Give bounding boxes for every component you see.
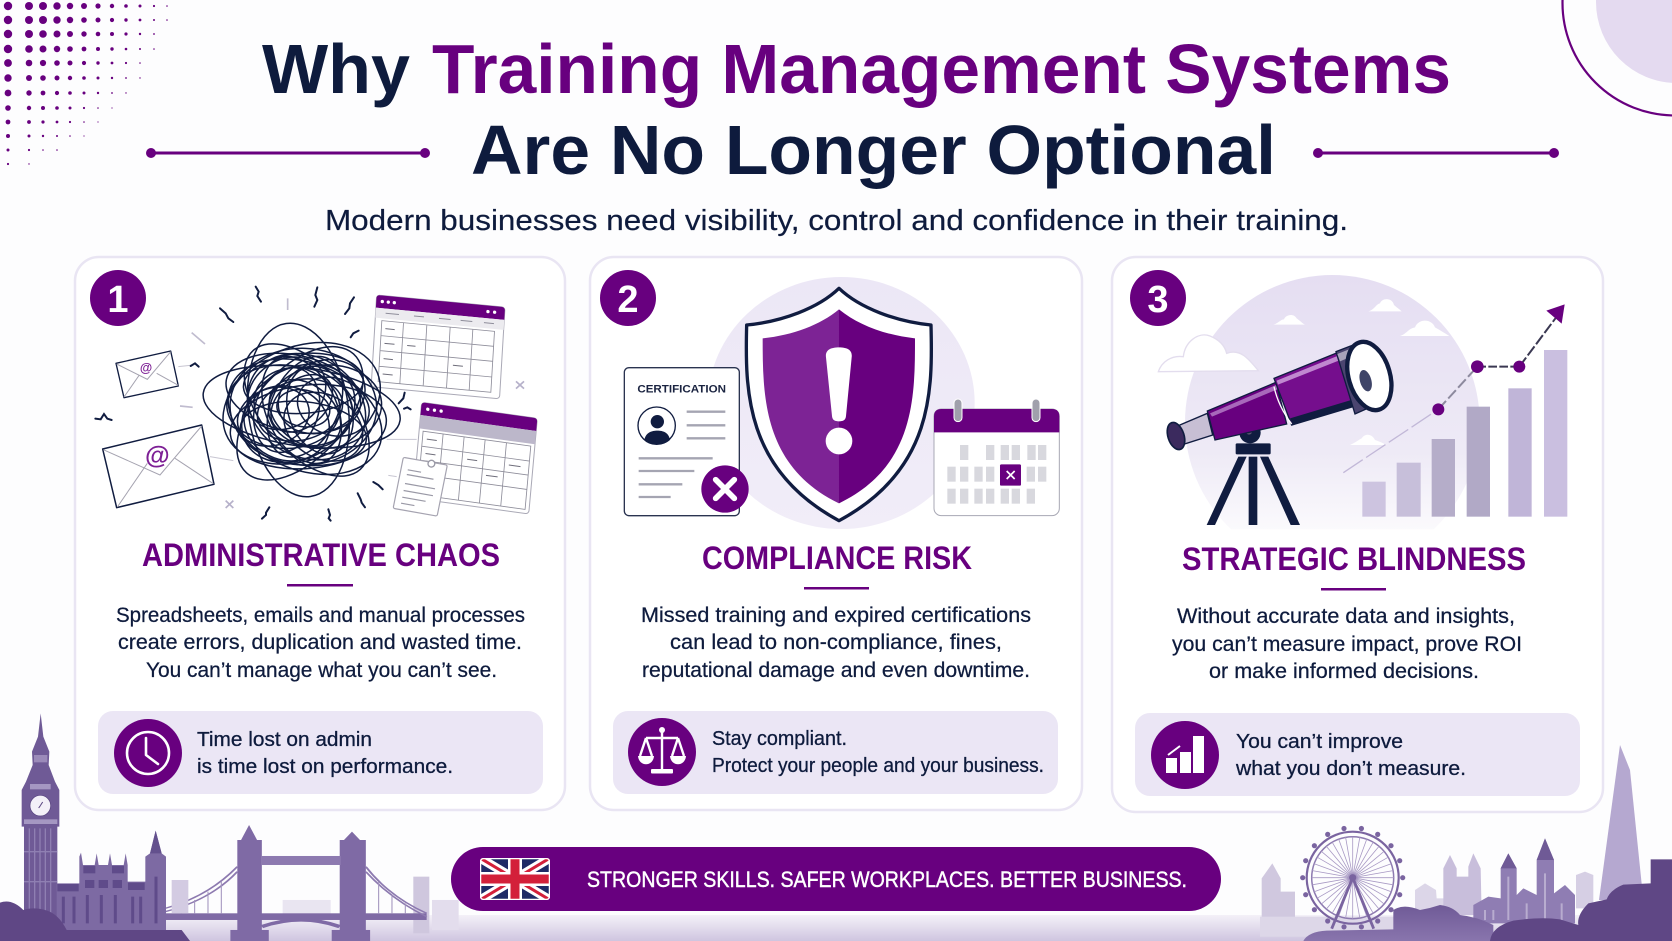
parliament (57, 831, 166, 940)
banner (451, 847, 1221, 911)
shard (1599, 745, 1643, 900)
callout: measure: You can’t improve (1236, 730, 1403, 753)
subtitle: Modern businesses need visibility, control and confidence in their training. (325, 205, 1348, 237)
callout: stay compliant: Stay compliant. (712, 727, 847, 750)
icon: scales (628, 718, 696, 786)
callout: measure: what you don’t measure. (1235, 757, 1466, 780)
chaos squiggles (95, 287, 524, 521)
bar chart (1362, 350, 1567, 517)
number badge 3: 3 (1147, 279, 1169, 321)
panel: strategic blindness (1112, 257, 1603, 812)
body text (1172, 605, 1522, 683)
body text: create errors, duplication and wasted time. (118, 631, 522, 654)
icon: spreadsheet front (413, 402, 537, 514)
number badge 1: 1 (107, 279, 129, 321)
big ben (22, 713, 59, 917)
icon: small envelope (116, 351, 178, 398)
title: Training Management Systems (432, 30, 1451, 108)
london eye (1300, 826, 1405, 930)
parliament: right (1473, 838, 1575, 923)
body text: can lead to non-compliance, fines, (670, 631, 1002, 654)
icon: calendar (934, 399, 1059, 516)
icon: bars (1151, 721, 1219, 789)
skyline: right (1260, 745, 1672, 941)
icon: telescope (1164, 337, 1399, 525)
title (262, 30, 1451, 189)
title: Why (262, 30, 410, 108)
illustration: tangled admin chaos (95, 287, 537, 521)
clouds (1158, 299, 1449, 445)
icon: small envelope: @ (140, 361, 152, 375)
callout: measure (1135, 713, 1580, 796)
icon: certification: CERTIFICATION (637, 384, 726, 396)
panel: compliance risk (590, 257, 1082, 810)
bottom haze (0, 915, 1672, 941)
number badge 2 (600, 270, 656, 326)
scribble ball (198, 317, 406, 503)
icon: large envelope (103, 425, 214, 508)
icon: clock (114, 719, 182, 787)
illustration: shield with certificate and calendar (624, 277, 1059, 529)
body text: you can’t measure impact, prove ROI (1172, 633, 1522, 656)
body text: Missed training and expired certifications (641, 604, 1031, 627)
body text: Without accurate data and insights, (1177, 605, 1515, 628)
banner: STRONGER SKILLS. SAFER WORKPLACES. BETTER BUSINESS. (587, 867, 1187, 892)
icon: note (393, 455, 448, 516)
body text: Spreadsheets, emails and manual processes (116, 604, 525, 627)
trees: left (0, 901, 190, 941)
body text (116, 604, 525, 682)
number badge 3 (1130, 270, 1186, 326)
heading: COMPLIANCE RISK (702, 540, 972, 576)
body text: or make informed decisions. (1209, 660, 1479, 683)
icon: shield (746, 288, 931, 521)
decoration: corner circle (1562, 0, 1672, 116)
body text (641, 604, 1031, 682)
heading: STRATEGIC BLINDNESS (1182, 541, 1526, 577)
callout: time lost: is time lost on performance. (197, 755, 453, 778)
icon: union flag (480, 858, 550, 900)
icon: spreadsheet back (371, 295, 505, 399)
icon: large envelope: @ (145, 442, 170, 470)
callout: stay compliant (613, 711, 1058, 794)
title rule right (1313, 148, 1559, 158)
body text: You can’t manage what you can’t see. (146, 659, 497, 682)
trend line (1343, 304, 1565, 473)
skyline: big ben and parliament (0, 713, 190, 941)
skyline: tower bridge (165, 825, 459, 941)
number badge 2: 2 (617, 279, 639, 321)
callout: time lost (98, 711, 543, 794)
heading: ADMINISTRATIVE CHAOS (142, 537, 500, 573)
hills: right (1303, 905, 1493, 941)
title rule left (146, 148, 430, 158)
number badge 1 (90, 270, 146, 326)
decoration: halftone dots (4, 2, 168, 165)
body text: reputational damage and even downtime. (642, 659, 1030, 682)
callout: time lost: Time lost on admin (197, 728, 372, 751)
icon: certification (624, 368, 749, 516)
title: Are No Longer Optional (471, 111, 1276, 189)
callout: stay compliant: Protect your people and your business. (712, 754, 1044, 777)
panel: administrative chaos (75, 257, 565, 810)
illustration: telescope and growth chart (1158, 275, 1568, 525)
